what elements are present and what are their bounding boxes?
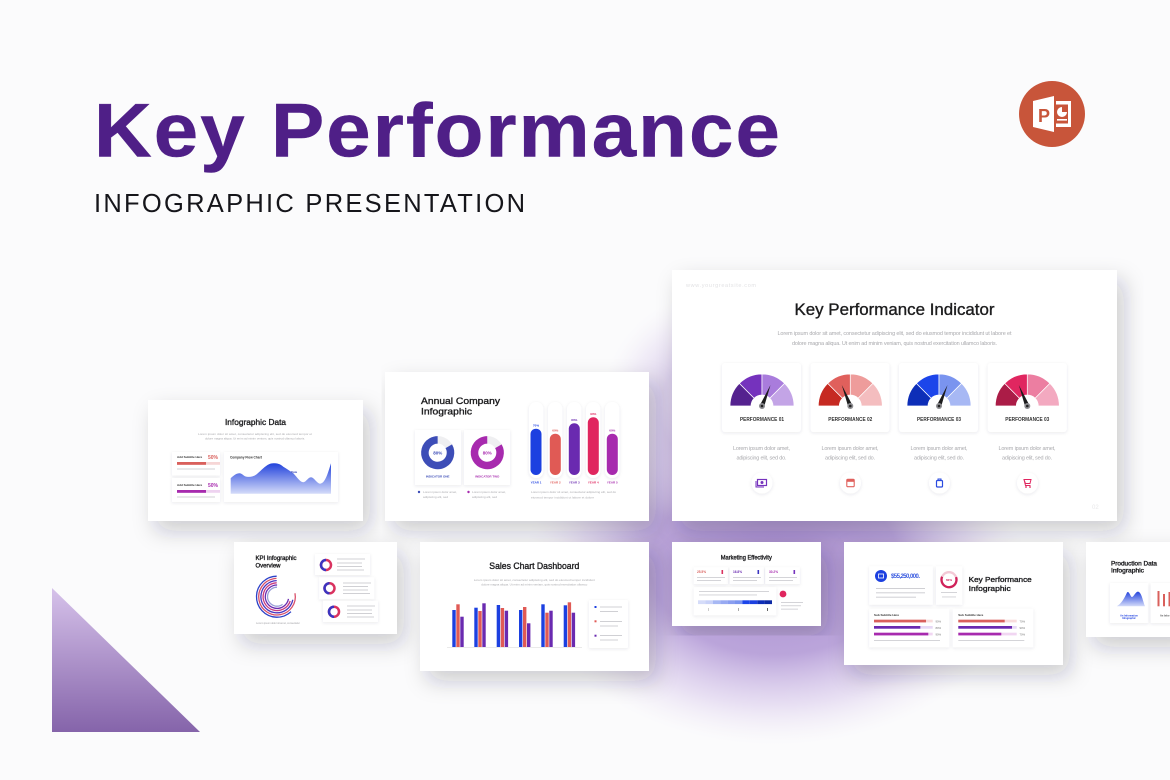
overview card two xyxy=(319,577,374,599)
panel: Annual Company slide xyxy=(385,372,649,521)
progress bar card right: 90% xyxy=(1020,626,1026,630)
progress donut card xyxy=(936,566,962,605)
revenue card xyxy=(869,566,933,605)
pill bar chart: YEAR 3 xyxy=(569,480,580,484)
panel: Key Performance Indicator slide xyxy=(672,270,1117,521)
mini bar chart card: An Infor xyxy=(1160,614,1170,618)
donut notes: Lorem ipsum dolor amet, xyxy=(423,490,457,494)
slide heading xyxy=(969,575,1032,593)
bar chart note xyxy=(531,490,616,500)
gauge card: performance 01: PERFORMANCE 01 xyxy=(740,417,784,423)
donut notes: adipiscing elit, sed xyxy=(423,495,448,499)
stat cards xyxy=(694,567,800,584)
slide heading: Production Data xyxy=(1111,562,1158,568)
donut card two: 80% xyxy=(483,450,492,456)
slide intro text xyxy=(778,331,1012,347)
panel: Marketing Effectivity slide xyxy=(672,542,821,626)
pill bar chart: YEAR 4 xyxy=(588,480,599,484)
progress bar card right: Sub Subtitle Here xyxy=(958,613,984,617)
mini area chart card: An Information xyxy=(1120,614,1138,618)
panel: Infographic Data slide xyxy=(148,400,363,521)
pill bar chart: 90% xyxy=(590,412,597,416)
slide intro text: dolore magna aliqua. Ut enim ad minim veniam, quis nostrud exercitation ullamco xyxy=(481,582,588,586)
slide heading xyxy=(256,556,296,570)
bar chart note: eiusmod tempor incididunt ut labore et dolore xyxy=(531,496,594,500)
radial chart xyxy=(248,568,306,626)
donut card one xyxy=(415,430,461,485)
gauge captions xyxy=(733,446,1056,462)
pill bar chart: YEAR 1 xyxy=(531,480,542,484)
gauge card: performance 02: PERFORMANCE 02 xyxy=(828,417,873,423)
slide heading: Infographic xyxy=(1111,568,1144,574)
pill bar chart: 70% xyxy=(533,424,539,428)
slide heading: Infographic xyxy=(969,584,1011,593)
pill bar chart: YEAR 5 xyxy=(607,480,618,484)
slide intro text: Lorem ipsum dolor sit amet, consectetur adipiscing elit, sed do eiusmod tempor incididunt ut labore et xyxy=(778,331,1012,337)
KPI card one xyxy=(172,452,220,476)
area chart card: Data xyxy=(291,470,298,474)
slide heading: Marketing Effectivity xyxy=(721,556,772,562)
bar chart note: Lorem ipsum dolor sit amet, consectetur adipiscing elit, sed do xyxy=(531,490,616,494)
mini area chart card xyxy=(1110,583,1148,623)
radial chart caption: Lorem ipsum dolor sit amet, consectetur xyxy=(256,621,300,625)
progress bar card left xyxy=(869,609,949,647)
title: Key Performance xyxy=(94,88,782,174)
area chart card xyxy=(224,452,338,502)
gauge captions: adipiscing elit, sed do. xyxy=(1002,456,1052,462)
slide heading: Key Performance xyxy=(969,575,1032,584)
panel: KPI Infographic Overview slide xyxy=(234,542,397,634)
gauge captions: adipiscing elit, sed do. xyxy=(914,456,964,462)
donut card one: INDICATOR ONE xyxy=(426,474,450,478)
slide heading: Infographic xyxy=(421,406,472,418)
KPI card one: 50% xyxy=(208,455,219,461)
KPI card two: Add Subtitle Here xyxy=(177,483,203,487)
donut notes: adipiscing elit, sed xyxy=(472,495,497,499)
slide heading: Infographic Data xyxy=(225,417,286,427)
purple glow xyxy=(525,290,1025,745)
slide heading xyxy=(1111,562,1158,574)
progress bar card left: 90% xyxy=(936,632,942,636)
progress bar card left: 90% xyxy=(936,620,942,624)
gauge card: performance 03 second xyxy=(988,363,1067,432)
website label: www.yourgreatsite.com xyxy=(685,283,756,289)
gauge captions: Lorem ipsum dolor amet, xyxy=(910,446,968,452)
slide intro text: Lorem ipsum dolor sit amet, consectetur adipiscing elit, sed do eiusmod tempor et xyxy=(198,432,312,436)
gauge card: performance 03: PERFORMANCE 03 xyxy=(917,417,961,423)
pill bar chart: YEAR 2 xyxy=(550,480,561,484)
overview card one xyxy=(315,554,370,575)
progress bar card right: 70% xyxy=(1020,620,1026,624)
gauge card: performance 01 xyxy=(722,363,801,432)
donut card one: 80% xyxy=(433,450,442,456)
slide intro text: dolore magna aliqua. Ut enim ad minim veniam, quis nostrud ullamco laboris. xyxy=(205,436,305,440)
donut card two xyxy=(464,430,510,485)
slide heading xyxy=(421,396,500,418)
icon: money xyxy=(752,472,772,494)
revenue card: $55,250,000. xyxy=(891,574,920,580)
gauge card: performance 03 second: PERFORMANCE 03 xyxy=(1005,417,1050,423)
stat cards: 25.5% xyxy=(697,570,706,574)
progress bar card right xyxy=(953,609,1033,647)
stat cards: 16.8% xyxy=(733,570,742,574)
pill bar chart: 80% xyxy=(571,418,578,422)
slide heading: Sales Chart Dashboard xyxy=(489,561,579,571)
gauge captions: adipiscing elit, sed do. xyxy=(825,456,875,462)
area chart card: Company Flow Chart xyxy=(230,456,263,460)
slide intro text xyxy=(198,432,312,440)
gauge captions: Lorem ipsum dolor amet, xyxy=(733,446,790,452)
gauge captions: adipiscing elit, sed do. xyxy=(736,456,787,462)
gauge card: performance 03 xyxy=(899,363,978,432)
KPI card one: Add Subtitle Here xyxy=(177,455,203,459)
progress bar card right: 70% xyxy=(1020,632,1026,636)
slide heading: Annual Company xyxy=(421,396,500,407)
donut card two: INDICATOR TWO xyxy=(475,474,500,478)
panel: Production Data slide xyxy=(1086,542,1170,637)
pill bar chart xyxy=(529,402,619,484)
slide heading: Overview xyxy=(256,564,281,570)
gauge captions: Lorem ipsum dolor amet, xyxy=(998,446,1056,452)
pill bar chart: 60% xyxy=(552,428,559,432)
slide heading: KPI Infographic xyxy=(256,556,296,562)
icon: shopping cart xyxy=(1017,472,1038,494)
slide intro text xyxy=(474,578,595,586)
progress donut card: 60% xyxy=(946,578,952,582)
decorative triangle xyxy=(52,588,200,732)
progress bar card left: 80% xyxy=(936,626,942,630)
subtitle: INFOGRAPHIC PRESENTATION xyxy=(94,190,525,218)
donut notes: Lorem ipsum dolor amet, xyxy=(472,490,506,494)
grouped bar chart xyxy=(447,602,582,648)
icon: PowerPoint xyxy=(1019,81,1085,147)
KPI card two xyxy=(172,478,220,502)
overview card three xyxy=(323,601,378,622)
panel: Sales Chart Dashboard slide xyxy=(420,542,649,671)
heat bar card xyxy=(694,587,776,615)
icon: shopping bag xyxy=(929,472,950,494)
pill bar chart: 60% xyxy=(609,428,616,432)
panel: Key Performance Infographic slide xyxy=(844,542,1063,665)
slide heading: Key Performance Indicator xyxy=(794,301,995,319)
stat cards: 30.2% xyxy=(769,570,778,574)
page marker: 02 xyxy=(1092,505,1099,511)
icon: PowerPoint: P xyxy=(1038,106,1050,126)
gauge card: performance 02 xyxy=(810,363,890,432)
mini area chart card: Infographic xyxy=(1122,617,1136,620)
donut notes xyxy=(418,490,506,499)
KPI card two: 50% xyxy=(208,483,219,489)
chart legend card xyxy=(589,600,628,648)
alert note xyxy=(780,591,803,610)
progress bar card left: Sub Subtitle Here xyxy=(874,613,899,617)
gauge captions: Lorem ipsum dolor amet, xyxy=(822,446,879,452)
slide intro text: dolore magna aliqua. Ut enim ad minim veniam, quis nostrud exercitation ullamco laboris. xyxy=(792,341,997,347)
slide intro text: Lorem ipsum dolor sit amet, consectetur adipiscing elit, sed do eiusmod tempor incididunt xyxy=(474,578,595,582)
icon: browser window xyxy=(840,472,861,494)
